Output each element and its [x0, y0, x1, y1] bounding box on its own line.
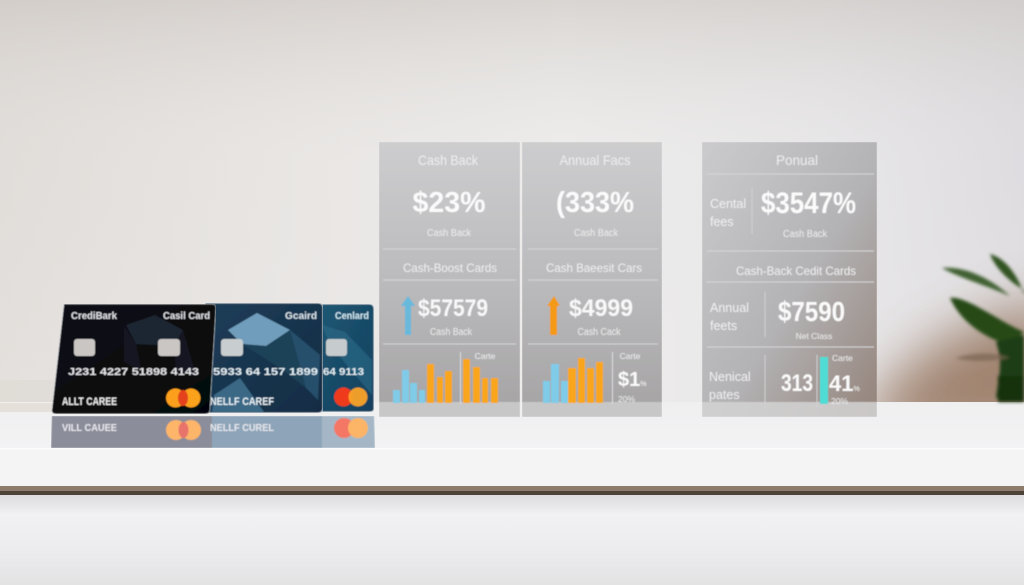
- bar chart: [543, 351, 646, 404]
- sub-heading: Cash Baeesit Cars: [546, 261, 642, 275]
- panel: personal: [702, 142, 877, 417]
- bar chart: [393, 351, 498, 404]
- credit card 1: black: [52, 304, 216, 414]
- sub-heading: Cash-Boost Cards: [403, 261, 497, 275]
- card reflections: VILL CAUEE: [62, 423, 117, 434]
- bar chart: $1%: [618, 369, 646, 391]
- label: Cental: [710, 197, 746, 211]
- value: (333%: [556, 187, 634, 219]
- panel: personal: Net Class: [796, 331, 832, 341]
- credit card 2: navy: Gcaird: [285, 310, 317, 322]
- panel: annual fees: Cash Back: [574, 228, 619, 239]
- credit card 2: navy: 5933 64 157 1899: [213, 366, 318, 378]
- panel: cash back: [379, 142, 520, 417]
- panel: personal: 20%: [831, 396, 848, 406]
- heading: Annual Facs: [560, 152, 630, 168]
- label: Annual: [710, 301, 749, 315]
- label: feets: [710, 319, 737, 333]
- credit card 1: black: CrediBark: [71, 311, 117, 322]
- panel: personal: Cash Back: [783, 229, 828, 240]
- credit card 1: black: Casil Card: [163, 311, 210, 322]
- sub-heading: Cash-Back Cedit Cards: [736, 264, 856, 278]
- bar chart: 20%: [618, 394, 635, 404]
- credit card 3: teal: 64 9113: [323, 367, 364, 378]
- icon: up arrow: [547, 296, 560, 335]
- label: Nenical: [709, 370, 751, 384]
- table surface: [0, 402, 1024, 585]
- mastercard logo: [334, 388, 368, 406]
- panel: personal: 41%: [829, 371, 860, 396]
- plant: [942, 254, 1024, 402]
- credit card 1: black: J231 4227 51898 4143: [68, 366, 199, 378]
- wall background: [0, 0, 1024, 440]
- icon: up arrow: [401, 296, 415, 335]
- credit card 2: navy: NELLF CAREF: [210, 396, 274, 408]
- teal bar: [820, 357, 828, 404]
- panel: annual fees: [522, 142, 662, 417]
- panel: cash back: Cash Back: [427, 228, 472, 239]
- value: $4999: [569, 295, 633, 322]
- credit card 3: teal: Cenlard: [335, 311, 369, 322]
- card reflections: [51, 416, 375, 448]
- heading: Ponual: [776, 152, 818, 168]
- panel: personal: Carte: [832, 353, 853, 363]
- card reflections: NELLF CUREL: [210, 423, 274, 434]
- chip: [326, 339, 347, 356]
- value: $3547%: [761, 187, 856, 220]
- bar chart: Carte: [475, 351, 496, 361]
- heading: Cash Back: [418, 152, 479, 168]
- value: $57579: [418, 295, 488, 322]
- value: 313: [781, 370, 813, 397]
- panel: annual fees: Cash Cack: [578, 327, 621, 338]
- credit card 3: teal: [318, 304, 374, 412]
- value: $7590: [778, 296, 845, 327]
- label: pates: [709, 388, 740, 402]
- bar chart: Carte: [620, 351, 641, 361]
- value: $23%: [412, 187, 486, 219]
- credit card 1: black: ALLT CAREE: [62, 396, 117, 408]
- mastercard logo: [166, 388, 200, 408]
- panel: cash back: Cash Back: [430, 327, 473, 338]
- credit card 2: navy: [205, 303, 323, 413]
- label: fees: [710, 215, 734, 229]
